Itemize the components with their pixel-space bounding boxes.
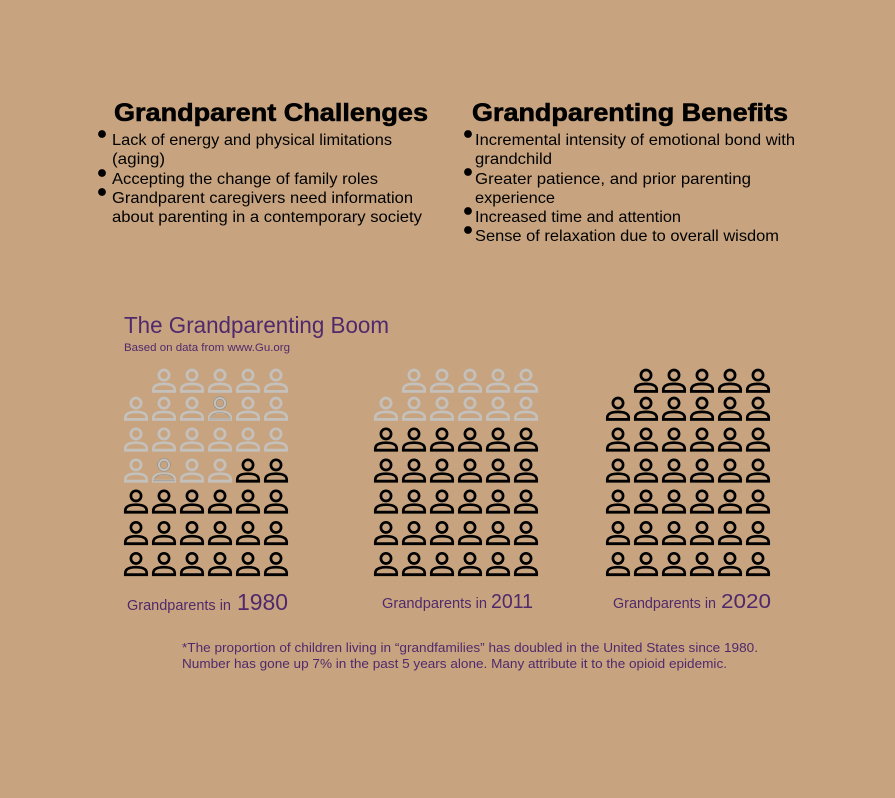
- pictogram: grandparents in 1980: [124, 370, 288, 575]
- caption: 2020: 2020: [721, 590, 771, 613]
- list: challenges: about parenting in a contemporary society: [112, 209, 422, 226]
- list: benefits: experience: [475, 190, 555, 207]
- chart subtitle: Based on data from www.Gu.org: [124, 342, 290, 354]
- footnote: Number has gone up 7% in the past 5 years alone. Many attribute it to the opioid epidemic.: [182, 656, 727, 671]
- caption: 2020: Grandparents in: [613, 596, 716, 612]
- caption: 1980: 1980: [237, 589, 288, 615]
- caption: 2011: Grandparents in: [382, 596, 487, 612]
- list: benefits: [464, 130, 795, 245]
- caption: 2011: 2011: [491, 590, 533, 613]
- caption: 1980: Grandparents in: [127, 598, 231, 614]
- list: challenges: Accepting the change of family roles: [112, 171, 378, 188]
- caption: 2020: [613, 590, 771, 613]
- list: benefits: Increased time and attention: [475, 209, 681, 226]
- pictogram: grandparents in 2020: [606, 370, 770, 575]
- panel: grandparenting benefits: [464, 99, 795, 245]
- list: benefits: Greater patience, and prior parenting: [475, 171, 751, 188]
- list: benefits: Sense of relaxation due to overall wisdom: [475, 228, 779, 245]
- footnote: [182, 640, 758, 671]
- list: challenges: [98, 130, 422, 226]
- list: challenges: Grandparent caregivers need information: [112, 190, 413, 207]
- heading: benefits: Grandparenting Benefits: [472, 99, 788, 127]
- list: benefits: Incremental intensity of emotional bond with: [475, 132, 795, 149]
- pictogram: grandparents in 2011: [374, 370, 538, 575]
- caption: 1980: [127, 589, 288, 615]
- footnote: *The proportion of children living in “grandfamilies” has doubled in the United States since 1980.: [182, 640, 758, 655]
- list: benefits: grandchild: [475, 151, 552, 168]
- panel: grandparent challenges: [98, 99, 428, 226]
- heading: challenges: Grandparent Challenges: [114, 99, 428, 127]
- caption: 2011: [382, 590, 533, 613]
- list: challenges: (aging): [112, 151, 165, 168]
- list: challenges: Lack of energy and physical limitations: [112, 132, 392, 149]
- chart title: The Grandparenting Boom: [124, 312, 389, 338]
